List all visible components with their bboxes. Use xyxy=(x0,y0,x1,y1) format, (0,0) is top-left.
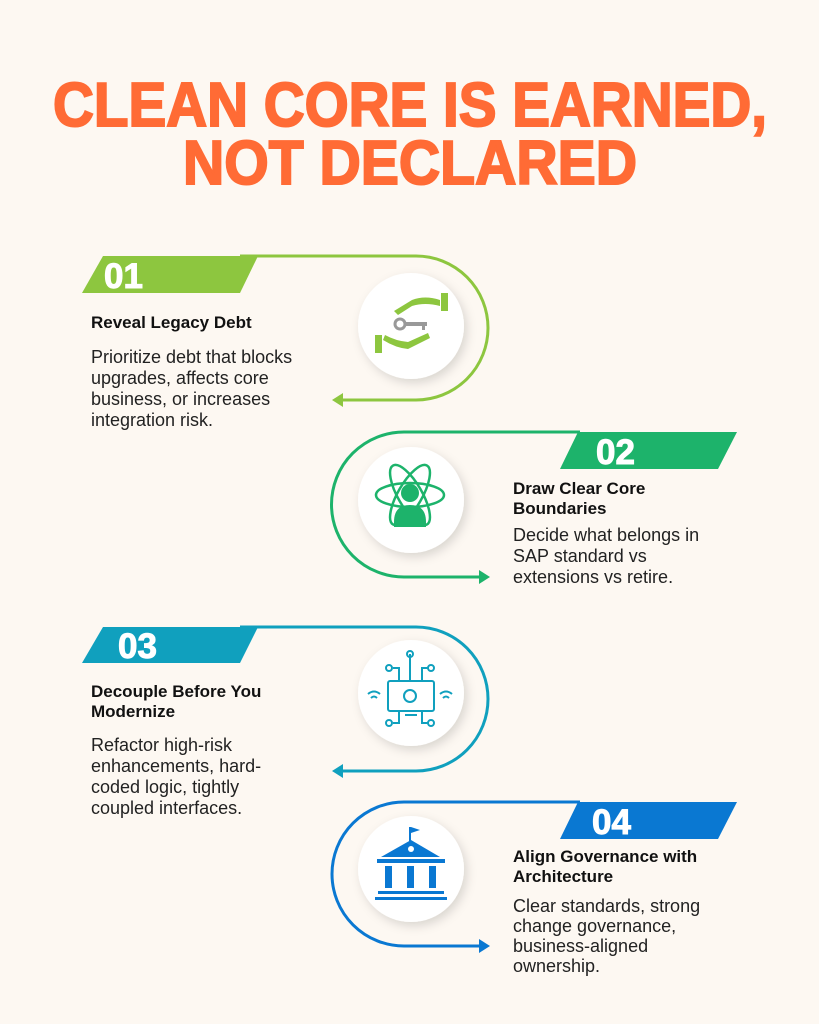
body 01: business, or increases xyxy=(91,389,270,409)
heading 01: Reveal Legacy Debt xyxy=(91,313,252,332)
title xyxy=(53,71,767,198)
body 02: SAP standard vs xyxy=(513,546,647,566)
heading 02: Draw Clear Core xyxy=(513,479,645,498)
tab 02 xyxy=(560,432,737,469)
path arrow 01 xyxy=(240,256,488,400)
path arrow 04 xyxy=(332,802,580,946)
body 01: Prioritize debt that blocks xyxy=(91,347,292,367)
path arrow 02 xyxy=(332,432,580,577)
body 04: ownership. xyxy=(513,956,600,976)
tab 01 xyxy=(82,256,258,293)
step 04: 04 xyxy=(592,803,631,842)
body 03: coupled interfaces. xyxy=(91,798,242,818)
body 02: Decide what belongs in xyxy=(513,525,699,545)
tab 04 xyxy=(560,802,737,839)
body 03: coded logic, tightly xyxy=(91,777,239,797)
body 04: business-aligned xyxy=(513,936,648,956)
icon circle 02: atom person xyxy=(358,447,464,553)
icon circle 03: monitor network xyxy=(358,640,464,746)
body 02: extensions vs retire. xyxy=(513,567,673,587)
body 03: enhancements, hard- xyxy=(91,756,261,776)
path arrow 03 xyxy=(240,627,488,771)
heading 04: Align Governance with xyxy=(513,847,697,866)
tab 03 xyxy=(82,627,258,663)
step 01: 01 xyxy=(104,257,143,296)
step 02: 02 xyxy=(596,433,635,472)
heading 03: Decouple Before You xyxy=(91,682,261,701)
step 02 xyxy=(332,432,737,587)
body 03: Refactor high-risk xyxy=(91,735,233,755)
step 04 xyxy=(332,802,737,976)
step 03 xyxy=(82,627,488,818)
body 04: Clear standards, strong xyxy=(513,896,700,916)
heading 03: Modernize xyxy=(91,702,175,721)
body 04: change governance, xyxy=(513,916,676,936)
title: CLEAN CORE IS EARNED, xyxy=(53,71,767,140)
body 01: upgrades, affects core xyxy=(91,368,269,388)
icon circle 01: hands with key xyxy=(358,273,464,379)
body 01: integration risk. xyxy=(91,410,213,430)
icon circle 04: building xyxy=(358,816,464,922)
heading 04: Architecture xyxy=(513,867,613,886)
heading 02: Boundaries xyxy=(513,499,607,518)
title: NOT DECLARED xyxy=(183,129,637,198)
step 01 xyxy=(82,256,488,430)
step 03: 03 xyxy=(118,627,157,666)
